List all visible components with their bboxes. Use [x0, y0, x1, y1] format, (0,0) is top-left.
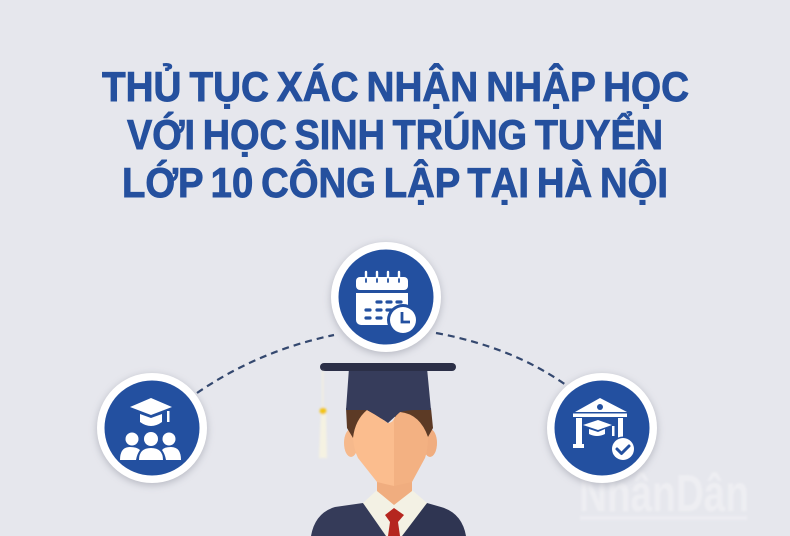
tie: [385, 508, 404, 536]
title: [102, 62, 689, 206]
title: THỦ TỤC XÁC NHẬN NHẬP HỌC: [102, 62, 689, 110]
ears: [344, 429, 358, 457]
icon: calendar badge: [331, 242, 441, 354]
shirt collar: [363, 490, 427, 536]
graduate figure: [311, 363, 466, 536]
icon: students badge: [97, 373, 207, 485]
calendar: [356, 272, 419, 336]
title: LỚP 10 CÔNG LẬP TẠI HÀ NỘI: [122, 158, 668, 206]
building: [573, 398, 627, 448]
mortarboard cap: [346, 368, 431, 423]
icon: school check badge: [547, 373, 657, 485]
neck: [377, 476, 412, 505]
people: [120, 432, 181, 460]
dashed arc connector: [197, 333, 566, 393]
tassel: [319, 371, 327, 458]
cap: [130, 398, 172, 426]
gown: [311, 503, 394, 536]
face: [353, 410, 394, 486]
hair: [346, 408, 433, 438]
title: VỚI HỌC SINH TRÚNG TUYỂN: [127, 110, 663, 158]
